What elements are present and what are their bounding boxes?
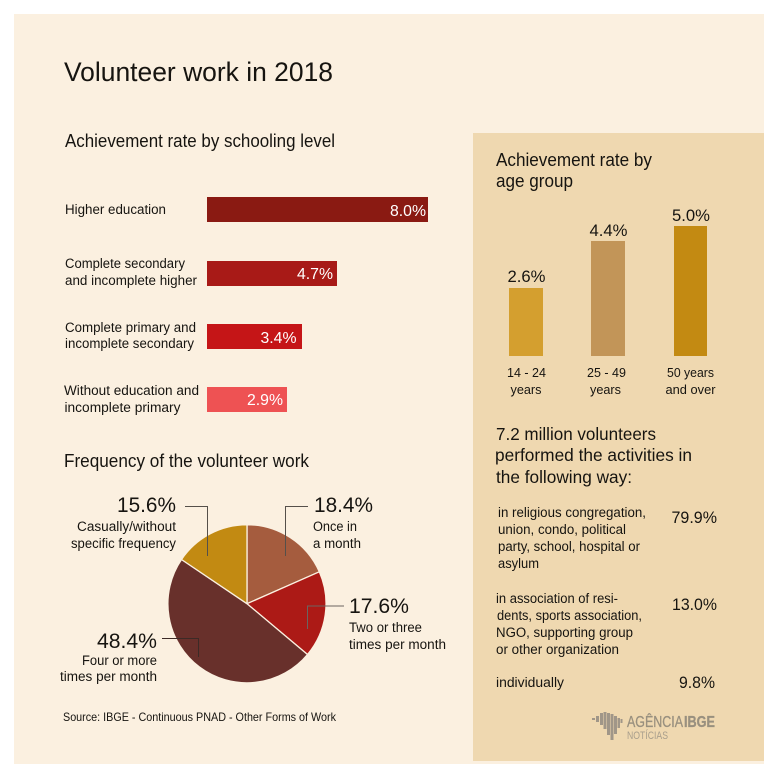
pie label: 18.4%: Once in bbox=[313, 519, 357, 534]
bar row: higher education bbox=[65, 197, 428, 222]
age bar: 50+: 50 years bbox=[667, 365, 714, 380]
pie slice: four or more bbox=[168, 560, 308, 683]
age bar: 14-24: 2.6% bbox=[508, 268, 546, 286]
age bar: 14-24: years bbox=[510, 382, 542, 397]
bar row: complete secondary: Complete secondary bbox=[65, 256, 185, 271]
panel: age group chart bbox=[496, 150, 716, 397]
age bar: 25-49: years bbox=[590, 382, 621, 397]
pie label: 48.4%: times per month bbox=[60, 669, 157, 684]
heading: schooling level: Achievement rate by schooling level bbox=[65, 131, 335, 151]
age bar: 50+: and over bbox=[666, 382, 716, 397]
logo: Agência IBGE Notícias: IBGE bbox=[684, 714, 715, 731]
title: Volunteer work in 2018 bbox=[64, 57, 333, 87]
pie label: 17.6%: times per month bbox=[349, 637, 446, 652]
bar row: complete primary: Complete primary and bbox=[65, 320, 196, 335]
pie label: 15.6%: 15.6% bbox=[117, 494, 176, 517]
pie label: 48.4%: 48.4% bbox=[97, 630, 157, 653]
bar row: complete primary: 3.4% bbox=[260, 330, 296, 347]
pie label: 48.4% bbox=[60, 630, 198, 684]
heading: volunteers: the following way: bbox=[496, 467, 632, 487]
heading: age group: Achievement rate by bbox=[496, 150, 652, 170]
activity: association: or other organization bbox=[496, 642, 619, 657]
bar row: higher education: 8.0% bbox=[390, 203, 426, 220]
activity: religious congregation: party, school, hospital or bbox=[498, 539, 640, 554]
age bar: 50+: 5.0% bbox=[672, 207, 710, 225]
activity: individually: individually bbox=[496, 675, 564, 690]
pie label: 17.6%: Two or three bbox=[349, 620, 422, 635]
activity: association: dents, sports association, bbox=[497, 608, 642, 623]
logo: Agência IBGE Notícias bbox=[592, 712, 715, 742]
logo: Agência IBGE Notícias: AGÊNCIA bbox=[627, 714, 684, 731]
bar row: without education bbox=[64, 383, 287, 415]
source note: Source: IBGE - Continuous PNAD - Other Forms of Work bbox=[63, 710, 337, 724]
right panel background bbox=[473, 133, 764, 761]
age bar: 14-24 bbox=[507, 268, 546, 397]
bar row: without education: Without education and bbox=[64, 383, 199, 398]
activity: religious congregation: union, condo, political bbox=[498, 522, 626, 537]
activity: association bbox=[496, 591, 717, 657]
bar row: complete secondary bbox=[65, 256, 337, 288]
activity: association: in association of resi- bbox=[496, 591, 618, 606]
bar row: higher education: Higher education bbox=[65, 202, 166, 217]
pie slice: once a month bbox=[247, 525, 319, 604]
pie label: 15.6%: Casually/without bbox=[77, 519, 176, 534]
bar row: complete secondary: 4.7% bbox=[297, 266, 333, 283]
panel: schooling level chart bbox=[64, 131, 428, 415]
pie label: 48.4%: Four or more bbox=[82, 653, 157, 668]
pie chart bbox=[168, 525, 326, 683]
heading: frequency: Frequency of the volunteer work bbox=[64, 451, 310, 471]
age bar: 25-49: 4.4% bbox=[590, 222, 628, 240]
icon: IBGE bars bbox=[592, 712, 622, 740]
heading: volunteers: performed the activities in bbox=[495, 445, 692, 465]
activity: religious congregation bbox=[498, 505, 717, 571]
bar row: complete primary bbox=[65, 320, 302, 351]
activity: religious congregation: in religious congregation, bbox=[498, 505, 646, 520]
age bar: 50+ bbox=[666, 207, 716, 397]
activity: association: NGO, supporting group bbox=[496, 625, 633, 640]
panel: volunteer activities bbox=[495, 424, 717, 692]
age bar: 25-49: 25 - 49 bbox=[587, 365, 626, 380]
age bar: 25-49 bbox=[587, 222, 628, 397]
panel: age group chart: age group bbox=[496, 171, 573, 191]
heading: volunteers: 7.2 million volunteers bbox=[496, 424, 656, 444]
pie label: 18.4%: a month bbox=[313, 536, 361, 551]
activity: individually bbox=[496, 674, 715, 692]
bar row: complete primary: incomplete secondary bbox=[65, 336, 194, 351]
activity: religious congregation: 79.9% bbox=[672, 509, 717, 527]
bar row: without education: incomplete primary bbox=[64, 400, 181, 415]
pie slice: casually bbox=[182, 525, 247, 604]
activity: association: 13.0% bbox=[672, 596, 717, 614]
activity: religious congregation: asylum bbox=[498, 556, 539, 571]
logo: Agência IBGE Notícias: NOTÍCIAS bbox=[627, 729, 668, 742]
heading: volunteers bbox=[495, 424, 692, 487]
pie label: 17.6%: 17.6% bbox=[349, 595, 409, 618]
bar row: complete secondary: and incomplete higher bbox=[65, 273, 197, 288]
pie slice: two or three times bbox=[247, 572, 326, 654]
pie label: 15.6%: specific frequency bbox=[71, 536, 176, 551]
pie label: 15.6% bbox=[71, 494, 208, 556]
age bar: 14-24: 14 - 24 bbox=[507, 365, 546, 380]
pie label: 18.4% bbox=[286, 494, 373, 556]
bar row: without education: 2.9% bbox=[247, 392, 283, 409]
activity: individually: 9.8% bbox=[679, 674, 715, 692]
pie label: 17.6% bbox=[308, 595, 446, 652]
pie label: 18.4%: 18.4% bbox=[314, 494, 373, 517]
